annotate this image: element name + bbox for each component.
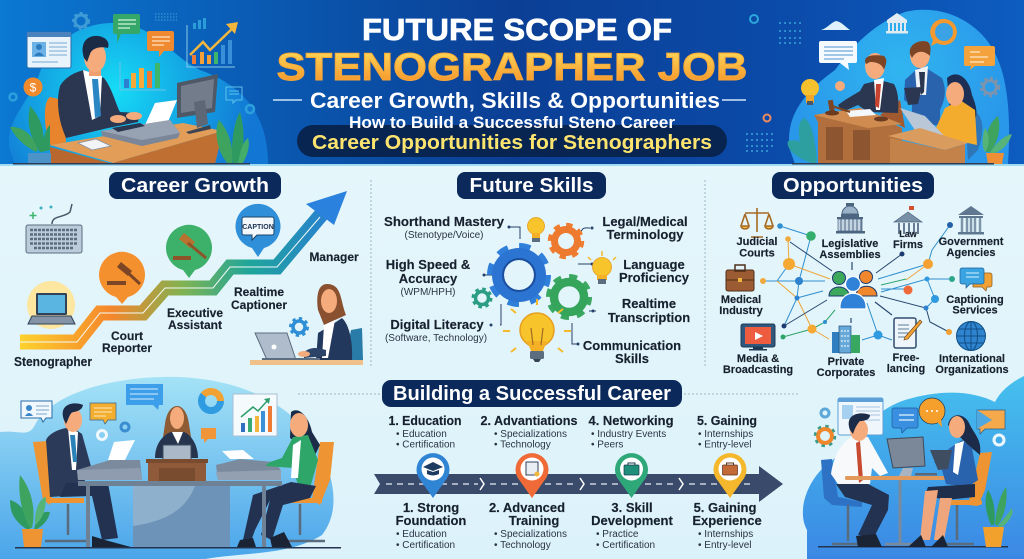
illustration: stenographer at desk — [9, 13, 268, 164]
label: realtime captioner: Realtime — [234, 285, 284, 299]
potted plant — [10, 475, 50, 547]
window card — [838, 398, 883, 435]
bottom milestone 2: • Technology — [494, 540, 551, 551]
top milestone 1 — [388, 413, 462, 450]
office chair — [45, 97, 66, 146]
gear: orange — [550, 225, 582, 257]
dollar coin — [24, 78, 42, 96]
top milestone 2: • Technology — [494, 440, 551, 450]
panel: career growth — [14, 172, 363, 369]
label: legislative assemblies: Legislative — [822, 238, 878, 250]
label: government agencies: Agencies — [947, 247, 995, 259]
heading: opportunities — [772, 172, 934, 199]
icon: gear — [290, 318, 308, 336]
man in suit — [58, 36, 142, 138]
bottom milestone 3: • Certification — [596, 540, 655, 551]
bottom milestone 2: 2. Advanced — [489, 500, 565, 515]
label: legislative assemblies: Assemblies — [819, 249, 881, 261]
label: wpm hph: (WPM/HPH) — [400, 287, 456, 298]
icon: law firm building — [894, 206, 922, 234]
white speech bubble — [819, 41, 857, 70]
plant left — [10, 106, 51, 164]
top milestone 3 — [588, 413, 674, 450]
career path arrow — [20, 191, 347, 342]
label: medical industry: Medical — [721, 294, 761, 306]
network lines — [763, 225, 952, 340]
top milestone 2: 2. Advantiations — [480, 413, 578, 428]
icon: office buildings — [832, 326, 860, 353]
heading: future skills: Future Skills — [470, 175, 594, 197]
window card — [27, 32, 71, 68]
dotted column dividers — [298, 180, 800, 394]
table and monitor — [845, 437, 946, 545]
label: communication skills: Communication — [583, 338, 681, 353]
label: international organizations: Organizations — [935, 364, 1009, 376]
icon: gavel bubble green — [166, 225, 212, 278]
location pin circle — [930, 19, 957, 46]
bottom milestone 2 — [489, 500, 567, 551]
label: media and broadcasting: Broadcasting — [723, 364, 793, 376]
icon: notepad and pencil — [894, 318, 922, 348]
label: language proficiency: Proficiency — [619, 270, 690, 285]
panel: opportunities — [719, 172, 1009, 379]
label: freelancing: lancing — [887, 363, 925, 375]
man at stenotype — [33, 403, 131, 547]
panel: future skills — [384, 172, 690, 366]
top milestone 4 — [697, 413, 757, 450]
icon: caption bubble — [236, 204, 280, 257]
label: judicial courts: Courts — [739, 248, 775, 260]
judge bench — [814, 108, 902, 164]
rising chart with arrow — [187, 18, 238, 67]
bottom milestone 3: 3. Skill — [611, 500, 653, 515]
desk — [50, 123, 223, 164]
bottom milestone 2: • Specializations — [494, 529, 567, 540]
standing man — [904, 41, 945, 125]
plant right with pot — [983, 116, 1012, 164]
judge — [835, 53, 905, 128]
gear: blue large — [490, 246, 548, 304]
gear: green — [548, 276, 590, 318]
bottom milestone 1: Foundation — [396, 513, 466, 528]
icon: gavel bubble orange — [99, 252, 145, 304]
heading: career growth — [109, 172, 281, 199]
illustration: team at conference table — [0, 377, 341, 559]
pin: advanced training — [516, 453, 548, 498]
pin: briefcase green — [615, 453, 648, 498]
green speech bubble — [113, 14, 140, 43]
label: executive assistant: Executive — [167, 306, 223, 320]
orange speech bubble — [147, 31, 174, 57]
label: executive assistant: Assistant — [168, 318, 222, 332]
top milestone 3: 4. Networking — [588, 413, 674, 428]
orange chat bubble — [919, 398, 945, 427]
label: government agencies: Government — [939, 236, 1003, 248]
icon: law label: Law — [899, 229, 918, 239]
connector dots — [482, 226, 594, 346]
label: legal medical terminology: Legal/Medical — [602, 214, 688, 229]
label: manager: Manager — [309, 250, 359, 264]
woman at stenotype — [237, 410, 334, 547]
bottom milestone 3: • Practice — [596, 529, 639, 540]
bank icon — [886, 13, 908, 34]
label: stenographer: Stenographer — [14, 355, 92, 369]
title line 1: FUTURE SCOPE OF — [362, 12, 672, 47]
stenotype machine — [101, 100, 180, 146]
label: high speed and accuracy: High Speed & — [386, 257, 470, 272]
mail icon — [977, 410, 1005, 434]
label: court reporter: Court — [111, 329, 143, 343]
icon: scales — [741, 208, 773, 237]
gears — [815, 409, 1004, 446]
label: legal medical terminology: Terminology — [606, 227, 684, 242]
bottom milestone 4: Experience — [692, 513, 762, 528]
label: freelancing: Free- — [893, 352, 919, 364]
icon: government building — [958, 206, 984, 234]
label: media and broadcasting: Media & — [737, 353, 779, 365]
left stenotype machine — [77, 440, 142, 480]
donut chart — [202, 392, 220, 410]
top milestone 3: • Peers — [591, 440, 623, 450]
network nodes — [760, 222, 955, 340]
career opportunities pill — [297, 125, 727, 157]
icon: large lightbulb — [503, 299, 571, 362]
top milestone 4: • Internships — [698, 429, 753, 440]
label: private corporates: Corporates — [817, 367, 875, 379]
top milestone 3: • Industry Events — [591, 429, 666, 440]
bottom milestone 2: Training — [509, 513, 559, 528]
header banner — [0, 0, 1024, 166]
computer monitor — [177, 74, 218, 134]
woman with laptop — [900, 74, 982, 160]
icon: people group — [829, 270, 877, 309]
conference table — [78, 481, 282, 547]
woman with tablet — [908, 415, 992, 547]
pin: briefcase yellow — [713, 453, 746, 498]
label: judicial courts: Judicial — [737, 236, 777, 248]
orange note bubble — [964, 46, 995, 70]
laptop desk — [888, 128, 968, 164]
blue chat bubble — [892, 408, 918, 433]
plant right — [216, 112, 249, 164]
heading: career growth: Career Growth — [121, 175, 269, 197]
label: captioning services: Captioning — [946, 294, 1004, 306]
label: shorthand mastery: Shorthand Mastery — [384, 214, 505, 229]
top milestone 4: 5. Gaining — [697, 413, 757, 428]
top milestone 1: 1. Education — [388, 413, 462, 428]
label: medical industry: Industry — [719, 305, 764, 317]
panel: building a successful career — [374, 380, 783, 551]
title line 2: STENOGRAPHER JOB — [276, 46, 748, 89]
lightbulb — [801, 79, 819, 105]
icon: chat bubbles — [960, 268, 992, 291]
label: court reporter: Reporter — [102, 341, 152, 355]
illustration: interview at table — [803, 376, 1024, 559]
bottom milestone 3: Development — [591, 513, 673, 528]
subtitle: Career Growth, Skills & Opportunities — [310, 88, 720, 113]
yellow bubble — [90, 403, 116, 424]
gear: teal small — [473, 289, 491, 307]
label: stenotype voice: (Stenotype/Voice) — [405, 230, 483, 241]
dollar coin: $ — [30, 80, 37, 94]
label: realtime captioner: Captioner — [231, 298, 287, 312]
icon: caption bubble: CAPTION — [242, 224, 274, 231]
label: digital literacy: Digital Literacy — [390, 317, 484, 332]
cloud — [821, 21, 850, 30]
bottom milestone 4: • Entry-level — [698, 540, 752, 551]
bottom milestone 1: • Education — [396, 529, 447, 540]
heading: opportunities: Opportunities — [783, 175, 923, 197]
small orange bubble — [201, 428, 216, 443]
icon: small lightbulb — [528, 218, 544, 242]
gears — [98, 423, 129, 440]
gear — [981, 78, 999, 96]
bottom milestone 4: 5. Gaining — [694, 500, 756, 515]
center woman at podium — [146, 406, 208, 481]
bar chart card — [233, 394, 277, 436]
illustration: manager at laptop — [250, 284, 363, 365]
top milestone 2: • Specializations — [494, 429, 567, 440]
label: high speed and accuracy: Accuracy — [399, 271, 458, 286]
label: law firms: Firms — [893, 239, 923, 251]
label: communication skills: Skills — [615, 351, 649, 366]
connector lines — [484, 227, 596, 344]
icon: briefcase — [726, 265, 754, 291]
icon: capitol — [836, 203, 865, 234]
pin: graduation cap — [416, 453, 450, 498]
top milestone 1: • Certification — [396, 440, 455, 450]
bottom milestone 1: 1. Strong — [403, 500, 459, 515]
tagline: How to Build a Successful Steno Career — [349, 114, 676, 132]
gavel — [825, 100, 888, 122]
man in white shirt — [821, 413, 889, 547]
blue bubble — [126, 384, 163, 410]
bottom milestone 3 — [591, 500, 673, 551]
career opportunities pill: Career Opportunities for Stenographers — [312, 132, 712, 154]
icon: language lightbulb — [588, 251, 616, 284]
illustration: courtroom team — [746, 10, 1012, 164]
label: language proficiency: Language — [623, 257, 685, 272]
icon: laptop — [27, 281, 75, 329]
label: realtime transcription: Transcription — [608, 310, 690, 325]
bottom milestone 4 — [692, 500, 762, 551]
gear icon — [73, 13, 89, 29]
heading: building a successful career: Building a Successful Career — [393, 383, 671, 405]
bottom milestone 1: • Certification — [396, 540, 455, 551]
right stenotype machine — [216, 450, 281, 480]
heading: future skills — [457, 172, 606, 199]
icon: video screen — [741, 324, 775, 350]
potted plant — [983, 487, 1013, 547]
top milestone 4: • Entry-level — [698, 440, 752, 450]
icon: globe — [956, 321, 986, 351]
plant left — [788, 118, 817, 164]
label: captioning services: Services — [952, 304, 998, 316]
contact bubble — [21, 401, 52, 422]
bottom milestone 4: • Internships — [698, 529, 753, 540]
label: software technology: (Software, Technology) — [385, 333, 487, 344]
label: private corporates: Private — [828, 356, 864, 368]
timeline road arrow — [374, 466, 783, 502]
label: realtime transcription: Realtime — [622, 296, 676, 311]
icon: keyboard — [26, 204, 82, 253]
top milestone 2 — [480, 413, 578, 450]
bottom milestone 1 — [396, 500, 466, 551]
label: international organizations: International — [939, 353, 1005, 365]
bar chart — [120, 62, 166, 90]
top milestone 1: • Education — [396, 429, 447, 440]
